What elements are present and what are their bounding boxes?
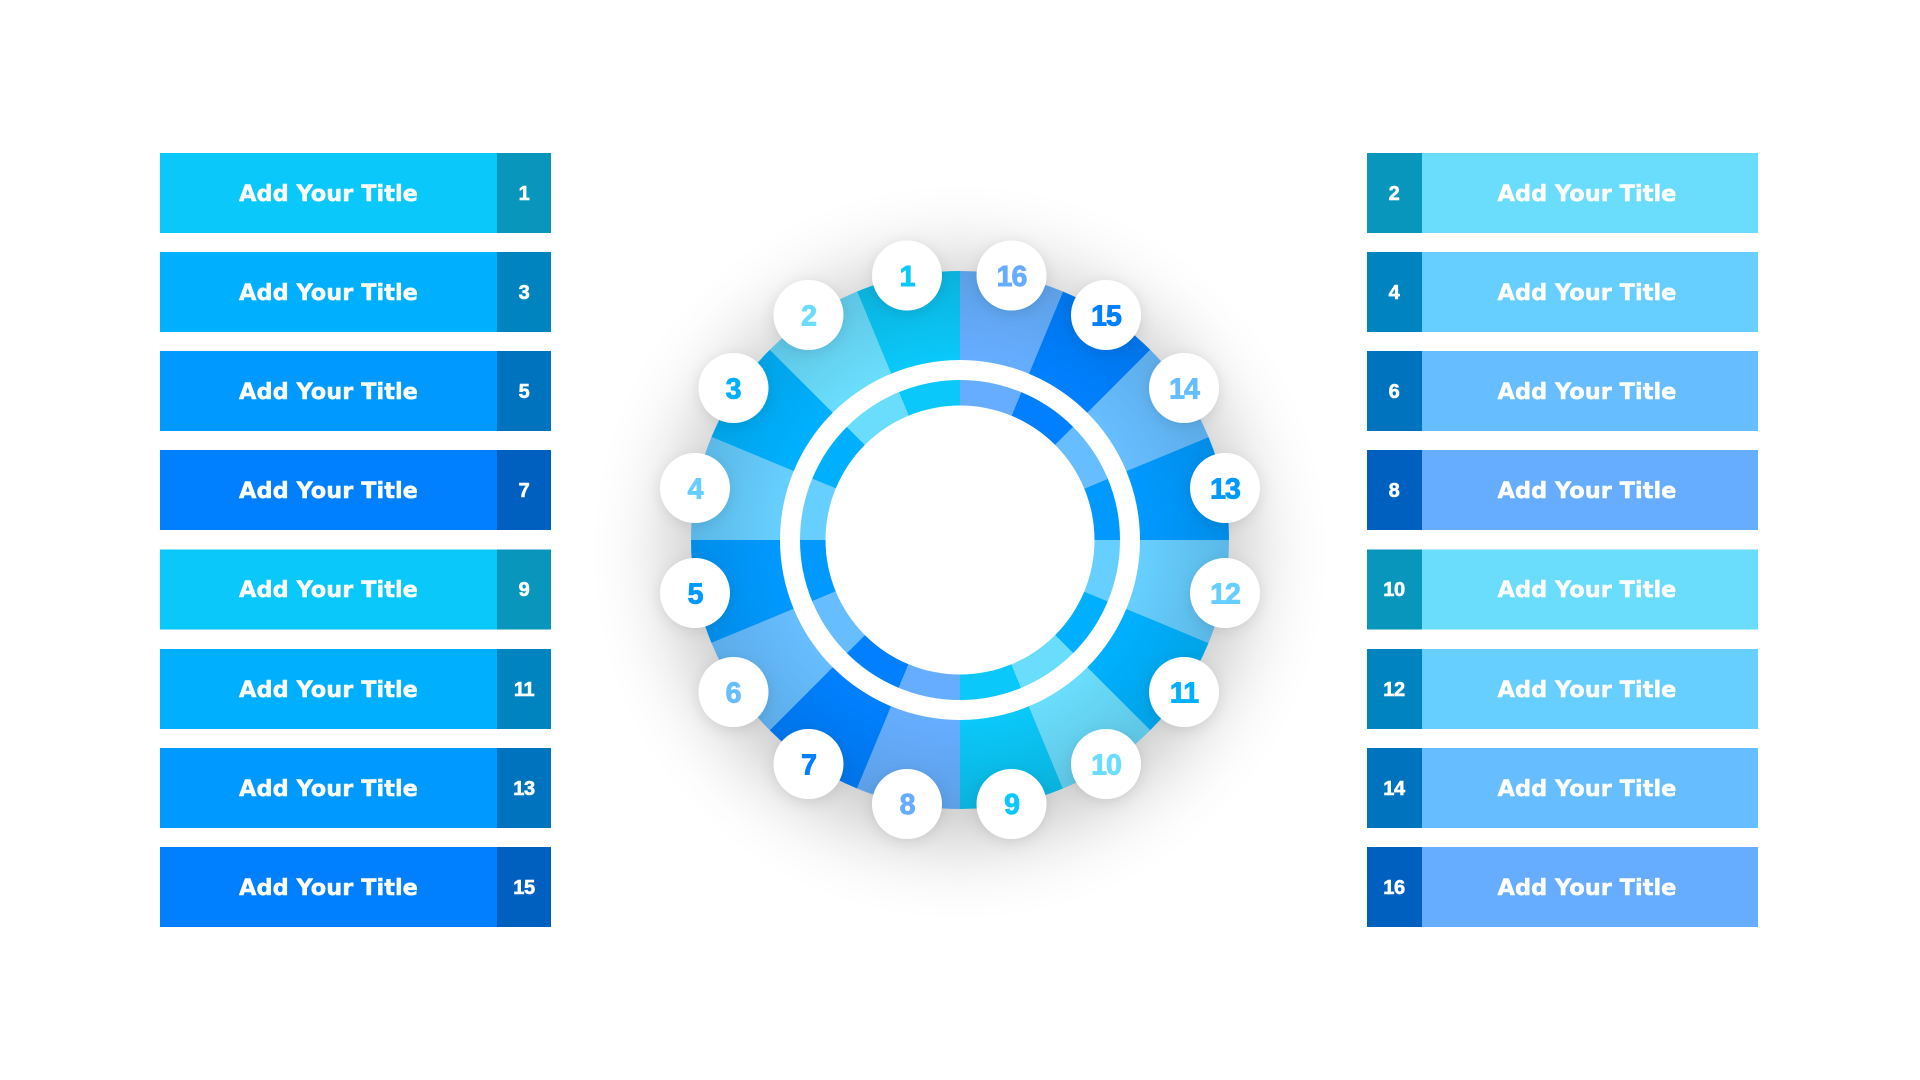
badge 11 <box>1149 657 1219 727</box>
badge 15: 15 <box>1091 300 1122 332</box>
bar 5: Add Your Title <box>239 379 418 405</box>
bar 6: Add Your Title <box>1498 379 1676 405</box>
badge 7: 7 <box>801 750 816 782</box>
badge 14 <box>1149 353 1219 423</box>
bar 15: 15 <box>513 877 535 899</box>
bar 3: Add Your Title <box>239 280 418 306</box>
bar 8 <box>1367 450 1758 530</box>
bar 15: Add Your Title <box>239 875 418 901</box>
badge 13 <box>1190 453 1260 523</box>
bar 15 <box>160 847 551 927</box>
bar 9: 9 <box>519 579 530 601</box>
badge 3 <box>698 353 768 423</box>
bar 16: 16 <box>1383 877 1405 899</box>
bar 2: 2 <box>1389 183 1400 205</box>
panel: left title bars <box>160 153 551 927</box>
badge 10: 10 <box>1091 750 1121 782</box>
bar 10: Add Your Title <box>1498 577 1676 603</box>
badge 14: 14 <box>1169 374 1200 406</box>
badge 2: 2 <box>801 300 816 332</box>
badge 15 <box>1071 280 1141 350</box>
bar 14: 14 <box>1383 778 1406 800</box>
badge 12: 12 <box>1210 578 1240 610</box>
badge 4 <box>660 453 730 523</box>
bar 10: 10 <box>1383 579 1405 601</box>
bar 7: 7 <box>519 480 530 502</box>
inner ring wedges <box>800 380 1120 700</box>
bar 8: Add Your Title <box>1498 478 1676 504</box>
bar 9 <box>160 550 551 630</box>
bar 3 <box>160 252 551 332</box>
badge 1 <box>872 240 942 310</box>
badge 9 <box>976 769 1046 839</box>
badge 12 <box>1190 558 1260 628</box>
bar 11: Add Your Title <box>239 677 418 703</box>
badge 13: 13 <box>1210 474 1240 506</box>
badge 1: 1 <box>900 261 916 293</box>
panel: right title bars <box>1367 153 1758 927</box>
badge 8 <box>872 769 942 839</box>
bar 8: 8 <box>1389 480 1400 502</box>
white centre circle <box>826 406 1094 674</box>
bar 11 <box>160 649 551 729</box>
badge 8: 8 <box>900 789 915 821</box>
bar 7: Add Your Title <box>239 478 418 504</box>
bar 7 <box>160 450 551 530</box>
bar 3: 3 <box>519 282 530 304</box>
bar 12 <box>1367 649 1758 729</box>
badge 7 <box>774 729 844 799</box>
bar 1: Add Your Title <box>239 181 418 207</box>
badge 4: 4 <box>688 474 704 506</box>
badge 5: 5 <box>688 578 704 610</box>
badge 9: 9 <box>1004 789 1019 821</box>
bar 4 <box>1367 252 1758 332</box>
bar 2 <box>1367 153 1758 233</box>
bar 6 <box>1367 351 1758 431</box>
bar 2: Add Your Title <box>1498 181 1676 207</box>
bar 4: 4 <box>1389 282 1401 304</box>
bar 5: 5 <box>519 381 530 403</box>
bar 1 <box>160 153 551 233</box>
badge 5 <box>660 558 730 628</box>
wheel shadow <box>670 262 1250 842</box>
bar 12: 12 <box>1383 679 1405 701</box>
number badges around the wheel <box>660 240 1260 839</box>
badge 16: 16 <box>997 261 1026 293</box>
badge 11: 11 <box>1170 678 1199 710</box>
bar 5 <box>160 351 551 431</box>
bar 4: Add Your Title <box>1498 280 1676 306</box>
bar 16: Add Your Title <box>1498 875 1676 901</box>
bar 12: Add Your Title <box>1498 677 1676 703</box>
outer wedges <box>691 271 1229 809</box>
badge 2 <box>774 280 844 350</box>
chart: sixteen segment wheel <box>691 271 1229 809</box>
bar 9: Add Your Title <box>239 577 418 603</box>
bar 10 <box>1367 550 1758 630</box>
badge 10 <box>1071 729 1141 799</box>
badge 16 <box>976 240 1046 310</box>
bar 6: 6 <box>1389 381 1400 403</box>
bar 16 <box>1367 847 1758 927</box>
bar 13: 13 <box>513 778 535 800</box>
bar 14 <box>1367 748 1758 828</box>
badge 6: 6 <box>726 678 741 710</box>
badge 3: 3 <box>726 374 741 406</box>
badge 6 <box>698 657 768 727</box>
bar 14: Add Your Title <box>1498 776 1676 802</box>
bar 13: Add Your Title <box>239 776 418 802</box>
bar 11: 11 <box>514 679 534 701</box>
bar 13 <box>160 748 551 828</box>
bar 1: 1 <box>519 183 530 205</box>
white separator ring <box>780 360 1140 720</box>
